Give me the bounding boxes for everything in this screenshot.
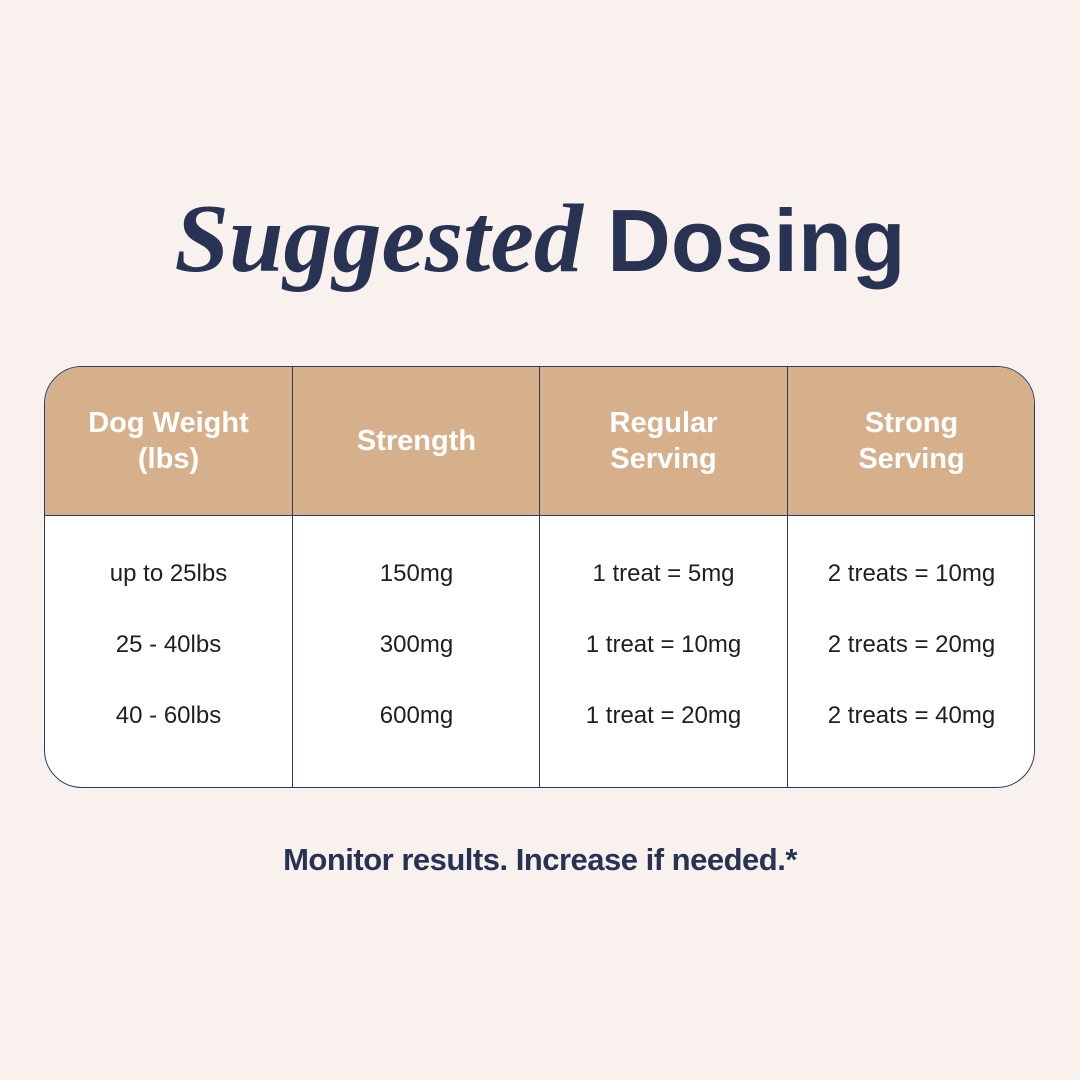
column: weights (110, 560, 227, 729)
column: strong: 2 treats = 20mg (828, 631, 995, 658)
header: strong serving: Strong (865, 407, 958, 439)
column: strengths: 300mg (380, 631, 453, 658)
column: strengths: 600mg (380, 702, 453, 729)
header: dog weight (88, 407, 249, 475)
header: dog weight: Dog Weight (88, 407, 249, 439)
header: dog weight: (lbs) (138, 443, 199, 475)
column: weights: up to 25lbs (110, 560, 227, 587)
column: strengths (380, 560, 453, 729)
header: strong serving: Serving (858, 443, 965, 475)
header row (45, 367, 1034, 516)
header: strength: Strength (357, 425, 476, 457)
column: regular: 1 treat = 10mg (586, 631, 741, 658)
header: regular serving: Serving (610, 443, 717, 475)
column: weights: 40 - 60lbs (116, 702, 221, 729)
header: regular serving (610, 407, 717, 475)
table (44, 366, 1035, 788)
column: strong: 2 treats = 10mg (828, 560, 995, 587)
column: strengths: 150mg (380, 560, 453, 587)
column: regular: 1 treat = 20mg (586, 702, 741, 729)
column: strong (828, 560, 995, 729)
column: regular (586, 560, 741, 729)
footer note: Monitor results. Increase if needed.* (283, 842, 797, 877)
header: regular serving: Regular (610, 407, 717, 439)
column: weights: 25 - 40lbs (116, 631, 221, 658)
header: strong serving (858, 407, 965, 475)
column: regular: 1 treat = 5mg (592, 560, 735, 587)
column: strong: 2 treats = 40mg (828, 702, 995, 729)
title: Suggested Dosing (174, 185, 906, 293)
